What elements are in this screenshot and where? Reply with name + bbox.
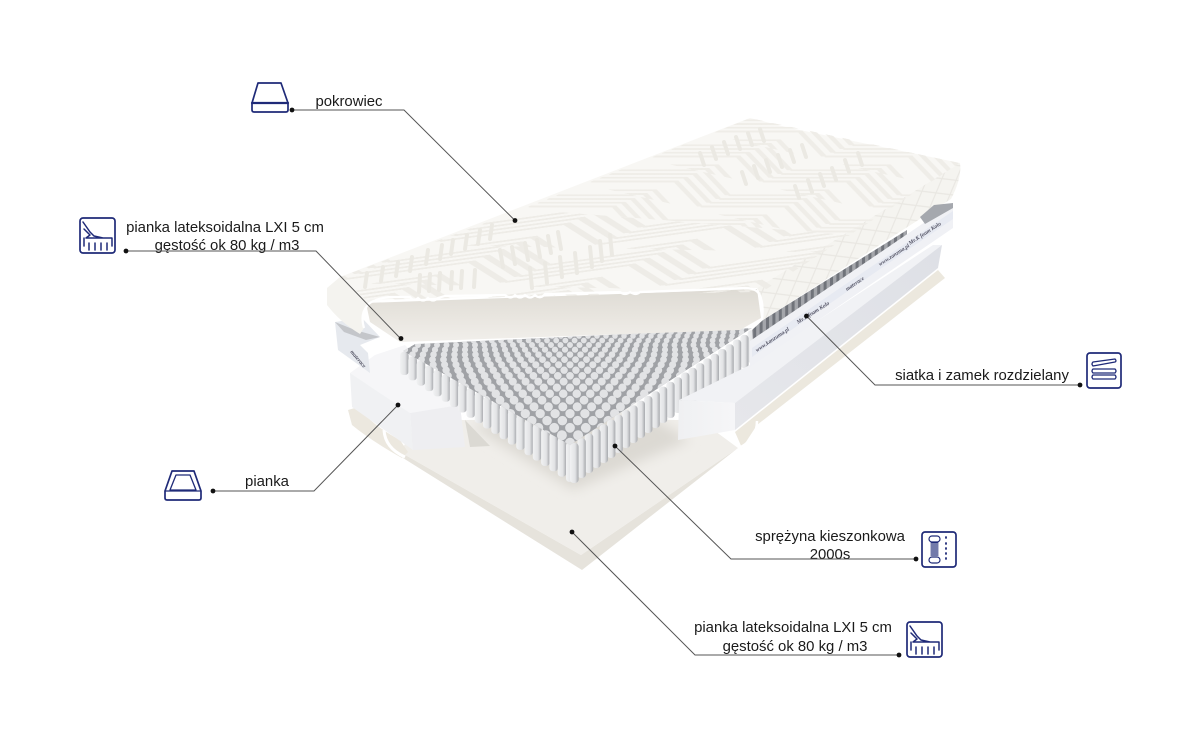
cover xyxy=(327,118,960,334)
callout: siatka i zamek: siatka i zamek rozdzielany xyxy=(895,368,1069,384)
callout: siatka i zamek xyxy=(804,314,1121,388)
icon: mattress cover xyxy=(252,83,288,112)
mesh strip with zipper xyxy=(750,203,953,367)
pocket springs xyxy=(401,328,753,483)
cover left fold xyxy=(327,270,400,334)
bottom cover strips xyxy=(348,270,945,458)
icon: latex foam bottom xyxy=(907,622,942,657)
callout: pianka lateksoidalna top xyxy=(80,218,403,341)
callout: pokrowiec xyxy=(252,83,517,223)
cover quilted ribs xyxy=(365,129,862,292)
label text: gęstość ok 80 kg / m3 xyxy=(155,238,299,254)
cover side face xyxy=(757,163,960,320)
cover top surface xyxy=(340,118,960,300)
mattress cutaway illustration xyxy=(327,118,960,570)
callout: pianka: pianka xyxy=(245,474,290,490)
icon: foam frame xyxy=(165,471,201,500)
grey spring band behind mesh xyxy=(752,230,907,342)
label text: pianka lateksoidalna LXI 5 cm xyxy=(126,220,324,236)
callout: pianka lateksoidalna bottom xyxy=(570,530,942,657)
upper latex foam layer xyxy=(366,289,761,342)
label text: sprężyna kieszonkowa xyxy=(755,529,906,545)
callout: pianka xyxy=(165,403,400,500)
spring tops xyxy=(403,328,752,445)
label text: pianka lateksoidalna LXI 5 cm xyxy=(694,620,892,636)
mesh strip with zipper: www.kanzuma.pl xyxy=(755,326,791,354)
left mesh bracket xyxy=(335,318,380,373)
mesh strip with zipper: www.zanzma.pl xyxy=(878,243,911,268)
icon: mesh layers xyxy=(1087,353,1121,388)
callout: pokrowiec: pokrowiec xyxy=(315,94,383,110)
icon: latex foam top xyxy=(80,218,115,253)
left mesh bracket: materace xyxy=(348,349,367,370)
right foam side block xyxy=(678,245,942,440)
label text: gęstość ok 80 kg / m3 xyxy=(723,639,867,655)
mesh strip with zipper: materace xyxy=(845,276,866,293)
bottom latex foam layer xyxy=(400,410,738,570)
icon: pocket spring xyxy=(922,532,956,567)
mesh strip with zipper: Mr.K foam Kolo xyxy=(907,221,943,247)
spring side walls xyxy=(400,330,756,483)
callout: sprezyna kieszonkowa xyxy=(613,444,956,567)
mesh strip with zipper: Mr.K foam Kolo xyxy=(795,301,831,326)
label text: 2000s xyxy=(810,547,850,563)
cover scalloped cut edge xyxy=(363,288,762,328)
left foam side block xyxy=(350,345,490,450)
